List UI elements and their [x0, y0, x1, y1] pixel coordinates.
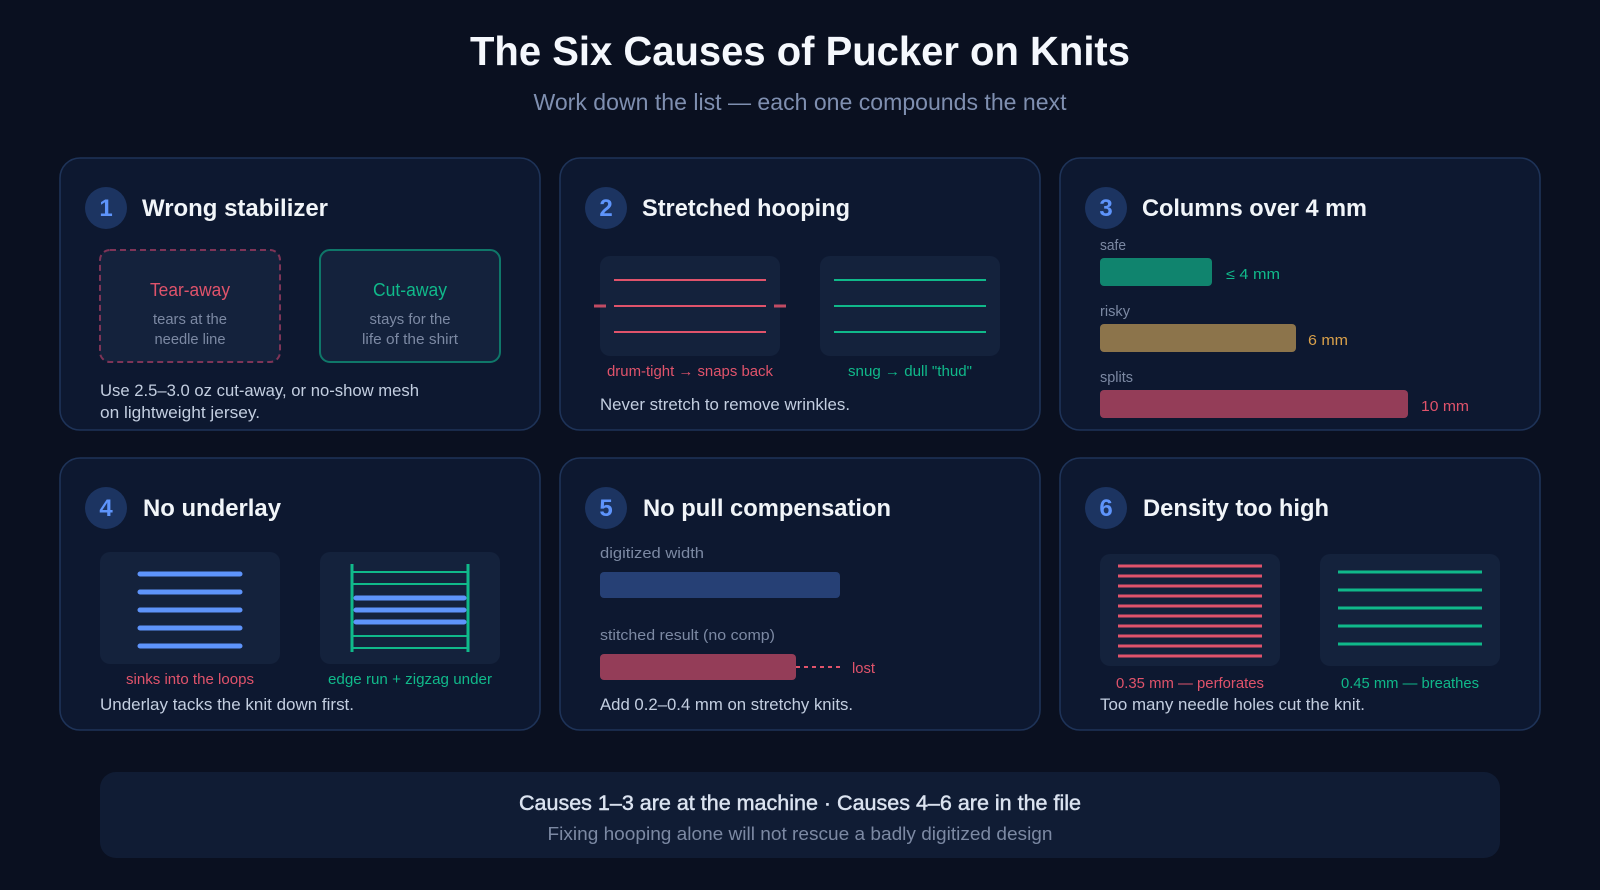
note: Use 2.5–3.0 oz cut-away, or no-show mesh	[100, 382, 419, 400]
caption: 0.45 mm: 0.45 mm — breathes	[1341, 676, 1479, 692]
number badge 6	[1085, 487, 1127, 529]
note: Add 0.2–0.4 mm on stretchy knits.	[600, 696, 853, 714]
bar: risky: 6 mm	[1308, 333, 1348, 349]
caption: 0.35 mm: 0.35 mm — perforates	[1116, 676, 1264, 692]
card background	[1060, 458, 1540, 730]
bar: stitched result	[600, 628, 875, 680]
summary band	[100, 772, 1500, 858]
panel: 5 no pull compensation	[560, 458, 1040, 730]
bar: safe: safe	[1100, 238, 1126, 254]
number badge 4: 4	[99, 495, 113, 522]
cut-away box: stays for the	[370, 312, 450, 328]
number badge 2: 2	[599, 195, 613, 222]
number badge 5	[585, 487, 627, 529]
panel: 2 stretched hooping	[560, 158, 1040, 430]
heading: Wrong stabilizer	[142, 195, 328, 222]
title: The Six Causes of Pucker on Knits	[470, 28, 1130, 74]
diagram: dense stitches	[1100, 554, 1280, 666]
tear-away box: tears at the	[153, 312, 227, 328]
note: Underlay tacks the knit down first.	[100, 696, 354, 714]
diagram: no underlay	[100, 552, 280, 664]
panel: 3 columns over 4 mm	[1060, 158, 1540, 430]
card background	[1060, 158, 1540, 430]
number badge 6: 6	[1099, 495, 1113, 522]
bar: stitched result: lost	[852, 661, 875, 677]
bar: risky	[1100, 304, 1348, 352]
bar: safe: ≤ 4 mm	[1226, 267, 1280, 283]
bar: digitized width	[600, 546, 840, 598]
cut-away box: life of the shirt	[362, 332, 458, 348]
tear-away box: needle line	[154, 332, 226, 348]
number badge 3: 3	[1099, 195, 1113, 222]
bar: digitized width: digitized width	[600, 546, 704, 562]
number badge 3	[1085, 187, 1127, 229]
card background	[60, 158, 540, 430]
bar: splits	[1100, 370, 1469, 418]
number badge 1: 1	[99, 195, 113, 222]
summary subline: Fixing hooping alone will not rescue a badly digitized design	[548, 823, 1052, 844]
heading: Density too high	[1143, 495, 1329, 522]
heading: Columns over 4 mm	[1142, 195, 1367, 222]
note: Too many needle holes cut the knit.	[1100, 696, 1365, 714]
bar: splits: 10 mm	[1421, 399, 1469, 415]
caption: sinks: sinks into the loops	[126, 672, 254, 688]
bar: safe	[1100, 238, 1280, 286]
number badge 1	[85, 187, 127, 229]
panel: 4 no underlay	[60, 458, 540, 730]
heading: Stretched hooping	[642, 195, 850, 222]
heading: No pull compensation	[643, 495, 891, 522]
card background	[560, 458, 1040, 730]
diagram: open stitches	[1320, 554, 1500, 666]
bar: stitched result: stitched result (no comp)	[600, 628, 775, 644]
summary headline: Causes 1–3 are at the machine · Causes 4–6 are in the file	[519, 792, 1081, 815]
number badge 2	[585, 187, 627, 229]
bar: risky: risky	[1100, 304, 1131, 320]
number badge 4	[85, 487, 127, 529]
snug diagram	[820, 256, 1000, 356]
note: Never stretch to remove wrinkles.	[600, 396, 850, 414]
tear-away box: Tear-away	[150, 280, 230, 300]
card background	[60, 458, 540, 730]
caption: drum-tight: drum-tight → snaps back	[607, 364, 774, 380]
card background	[560, 158, 1040, 430]
note: on lightweight jersey.	[100, 404, 260, 422]
tear-away box	[100, 250, 280, 362]
diagram: with underlay	[320, 552, 500, 664]
caption: snug: snug → dull "thud"	[848, 364, 972, 380]
bar: splits: splits	[1100, 370, 1133, 386]
panel: 1 wrong stabilizer	[60, 158, 540, 430]
panel: 6 density too high	[1060, 458, 1540, 730]
number badge 5: 5	[599, 495, 613, 522]
note	[100, 382, 419, 422]
cut-away box: Cut-away	[373, 280, 447, 300]
caption: edge run: edge run + zigzag under	[328, 672, 492, 688]
cut-away box	[320, 250, 500, 362]
heading: No underlay	[143, 495, 282, 522]
drum-tight diagram	[594, 256, 786, 356]
subtitle: Work down the list — each one compounds the next	[534, 89, 1067, 115]
